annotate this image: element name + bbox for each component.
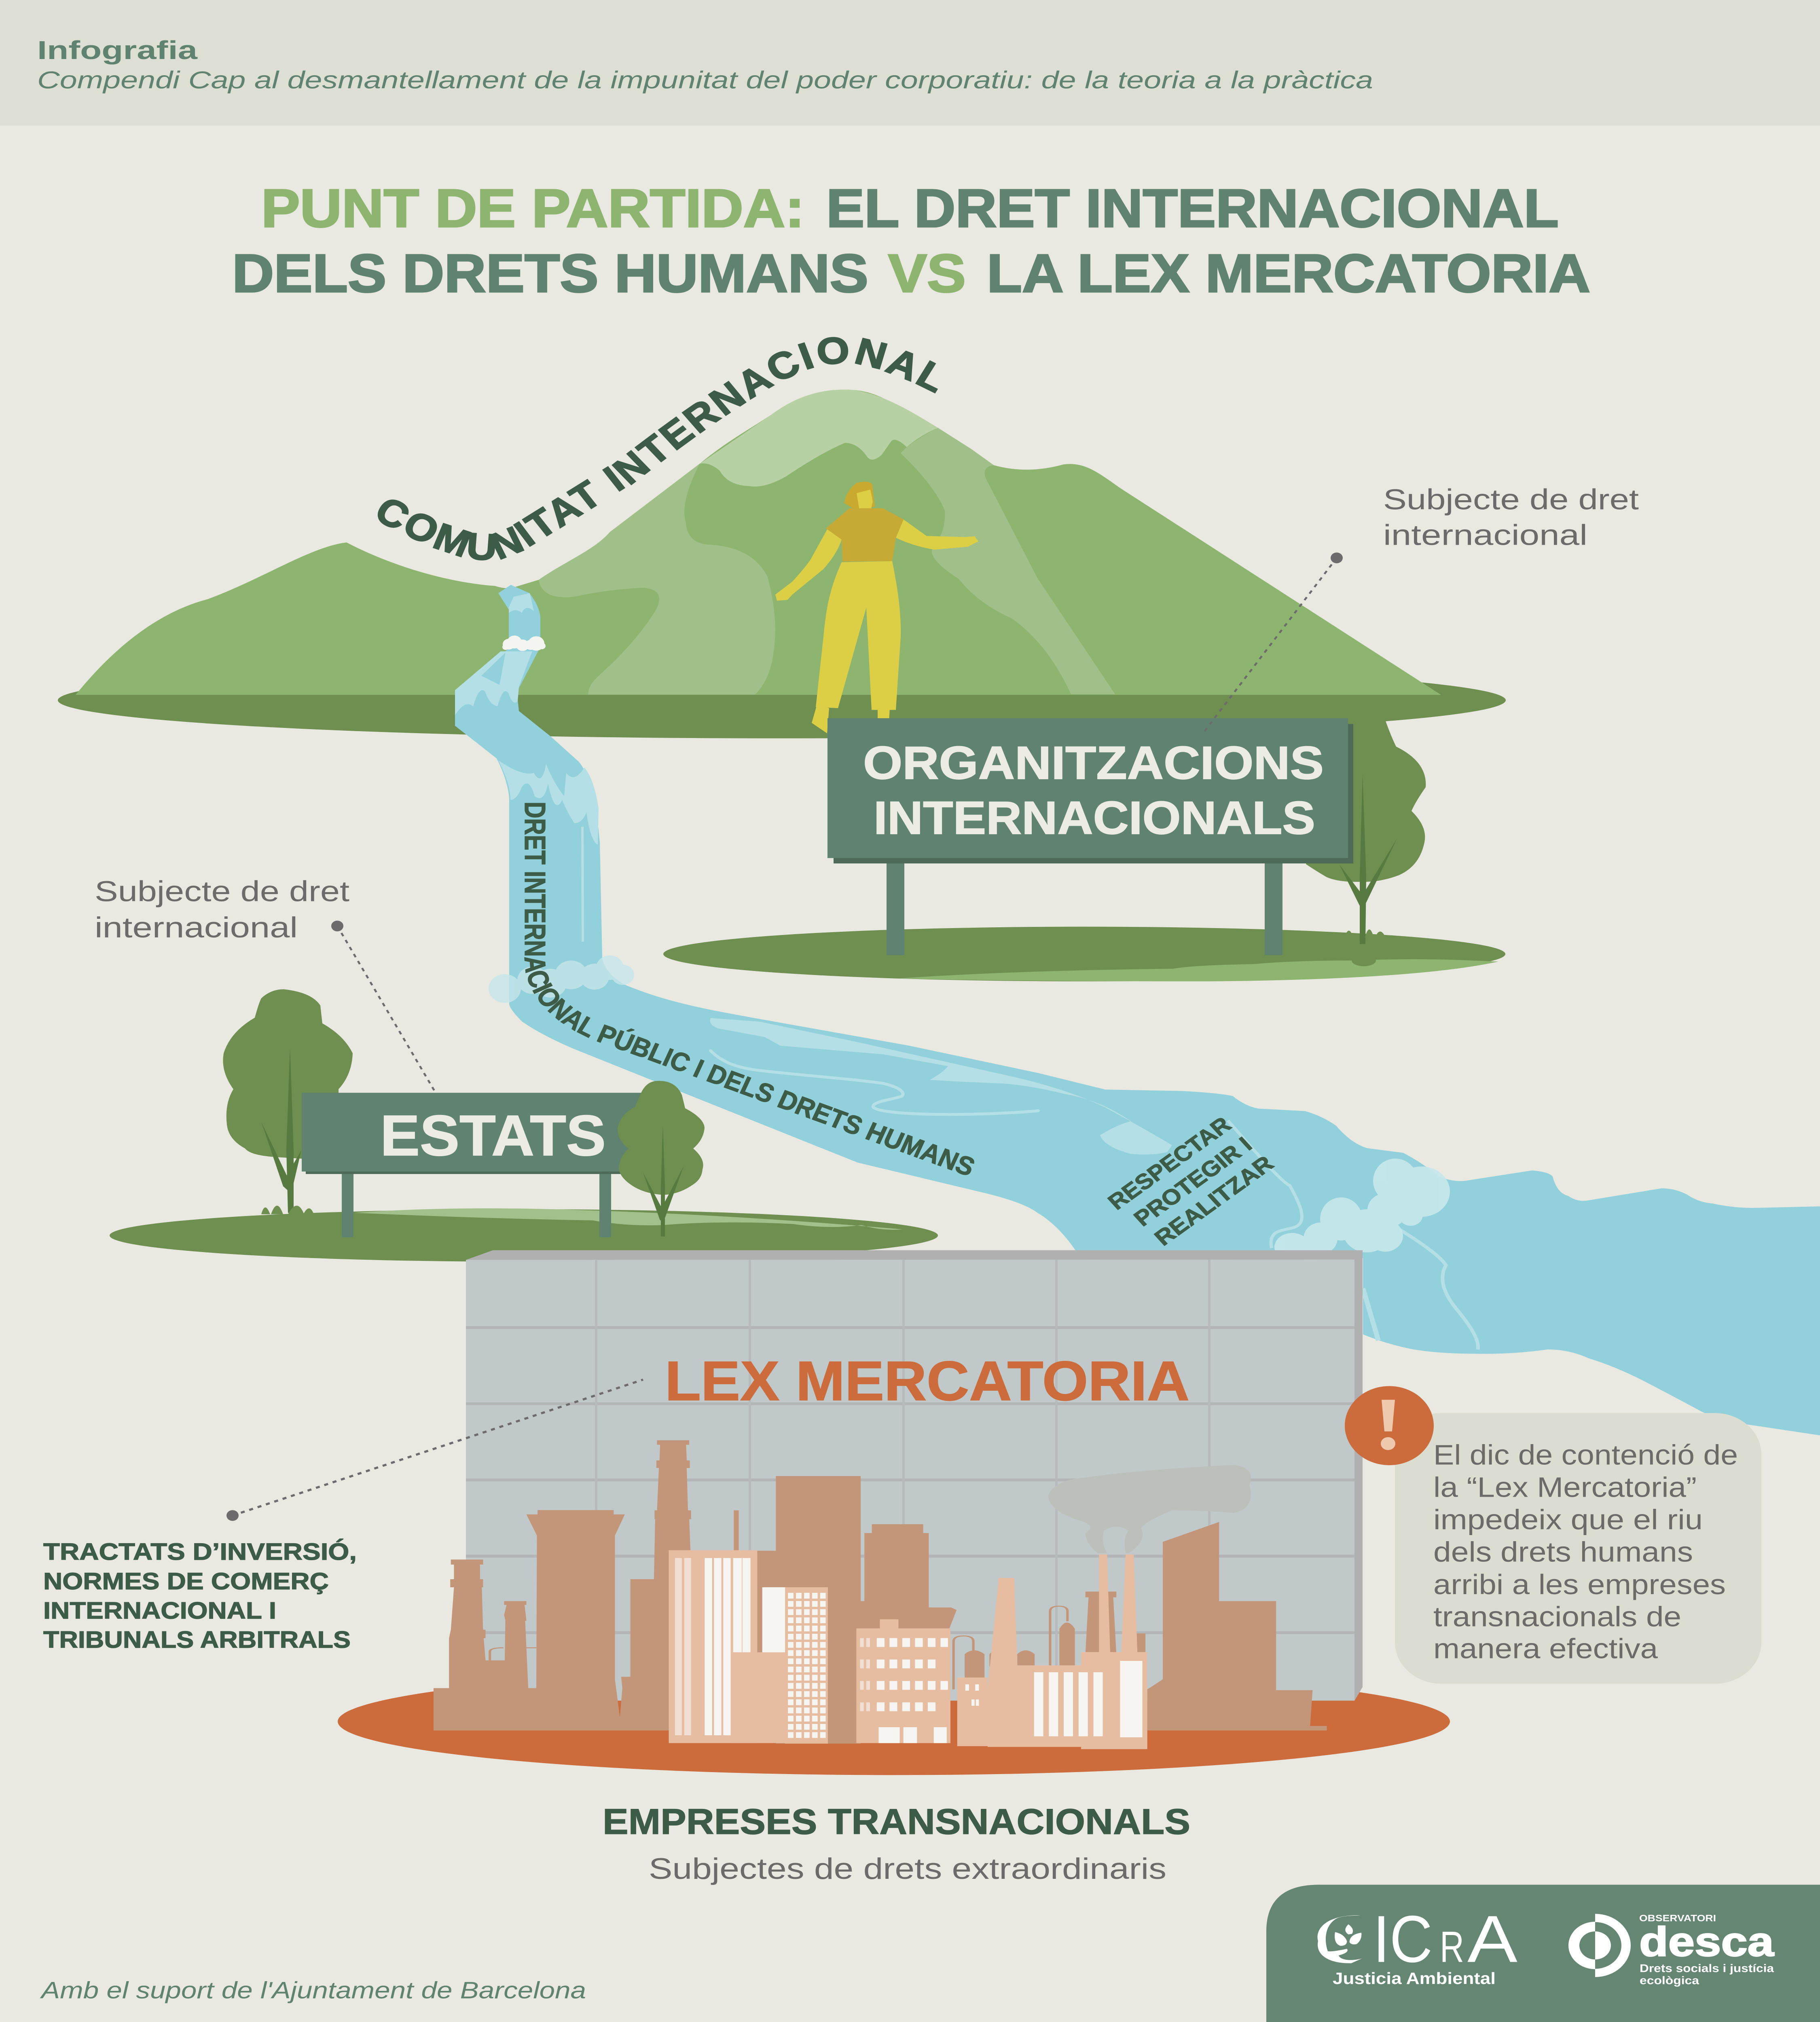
river thin current — [711, 1051, 1038, 1115]
tree: states right — [618, 1081, 705, 1237]
label: lex mercatoria instruments — [43, 1538, 357, 1653]
light tower — [669, 1550, 757, 1743]
dam wall: lex mercatoria — [466, 1250, 1363, 1701]
logo panel — [1266, 1885, 1820, 2022]
sign shadow — [306, 1168, 645, 1174]
heading: empreses transnacionals: EMPRESES TRANSNACIONALS — [603, 1802, 1190, 1842]
callout leader: lex mercatoria — [226, 1380, 643, 1521]
label: subjecte de dret, states: Subjecte de dret — [95, 876, 349, 907]
logo: cicra: IC — [1373, 1902, 1433, 1976]
label: subjecte de dret, states — [95, 876, 349, 944]
ground ellipse: companies — [338, 1668, 1450, 1775]
label: lex mercatoria instruments: TRIBUNALS ARBITRALS — [43, 1626, 351, 1653]
header band — [0, 0, 1820, 125]
person — [775, 482, 978, 733]
tree: organizations — [1306, 719, 1426, 966]
ground ellipse: states — [110, 1208, 938, 1262]
callout text: transnacionals de — [1433, 1601, 1681, 1632]
logo emblem — [1318, 1915, 1362, 1963]
tree: states left — [223, 989, 353, 1214]
logo: desca: Drets socials i justícia — [1640, 1962, 1774, 1975]
light factory — [957, 1555, 1147, 1749]
wall frame — [466, 1250, 1363, 1701]
dark buildings and chimneys — [434, 1440, 1327, 1744]
logo: desca: desca — [1639, 1919, 1775, 1965]
title: DELS DRETS HUMANS — [232, 243, 868, 304]
curved label: comunitat internacional: COMUNITAT INTERNACIONAL — [368, 328, 956, 569]
river — [455, 585, 1820, 1435]
callout text — [1433, 1439, 1738, 1664]
sign posts — [887, 858, 904, 955]
mountain peak highlight — [700, 390, 938, 486]
title: VS — [888, 243, 966, 304]
label: subjecte de dret, organizations: Subjecte de dret — [1383, 484, 1639, 516]
callout leader: organizations — [1202, 552, 1343, 734]
logo: desca: ecològica — [1640, 1974, 1699, 1987]
sign posts — [342, 1172, 353, 1237]
factory skyline — [434, 1440, 1327, 1749]
river right currents — [1228, 1121, 1302, 1248]
waterfall foam — [489, 956, 634, 1003]
light block three — [856, 1619, 950, 1743]
label: lex mercatoria instruments: INTERNACIONAL I — [43, 1597, 276, 1624]
mountain right light band — [901, 428, 1115, 694]
lower waterfall highlights — [498, 760, 599, 845]
subheading: subjectes de drets extraordinaris: Subjectes de drets extraordinaris — [649, 1853, 1166, 1885]
callout text: manera efectiva — [1433, 1633, 1658, 1664]
logo: desca — [1568, 1913, 1775, 1987]
sign: organitzacions internacionals: INTERNACIONALS — [874, 792, 1315, 844]
tree trunk and branches — [1339, 774, 1397, 944]
title: PUNT DE PARTIDA: — [261, 179, 804, 239]
callout text: El dic de contenció de — [1433, 1439, 1738, 1470]
river large foam — [1274, 1159, 1450, 1262]
person hair — [844, 482, 875, 511]
callout text: arribi a les empreses — [1433, 1569, 1726, 1600]
label: lex mercatoria instruments: TRACTATS D’INVERSIÓ, — [43, 1538, 357, 1565]
icon: warning — [1345, 1386, 1434, 1465]
upper waterfall highlights — [455, 651, 532, 715]
callout text: dels drets humans — [1433, 1536, 1693, 1567]
tree trunk and branches — [643, 1125, 684, 1237]
wall grid — [466, 1260, 1354, 1701]
river label: respectar, protegir, realitzar: PROTEGIR I — [1129, 1133, 1257, 1231]
ground ellipse: mountain — [58, 662, 1506, 738]
logo: cicra — [1318, 1902, 1517, 1988]
mountain — [76, 390, 1441, 695]
sign board — [302, 1093, 645, 1172]
callout text: impedeix que el riu — [1433, 1504, 1703, 1535]
sign text: ORGANITZACIONS — [863, 737, 1324, 789]
mountain left light band — [539, 464, 775, 694]
top foam — [502, 636, 546, 651]
logo: cicra: Justicia Ambiental — [1333, 1969, 1496, 1988]
callout leader: states — [331, 920, 435, 1092]
sign board — [827, 718, 1348, 858]
label: subjecte de dret, organizations: internacional — [1383, 519, 1587, 552]
person face — [857, 490, 873, 514]
river label: dret internacional: DRET INTERNACIONAL PÚBLIC I DELS DRETS HUMANS — [518, 802, 979, 1182]
logo: cicra: A — [1467, 1902, 1517, 1976]
river ripple — [710, 1018, 1172, 1155]
label: subjecte de dret, states: internacional — [95, 912, 298, 944]
callout text: la “Lex Mercatoria” — [1433, 1471, 1697, 1503]
pipes — [490, 1606, 1067, 1690]
person shirt — [826, 508, 904, 561]
light office block — [762, 1587, 785, 1652]
person arms — [775, 527, 842, 601]
sign text: ESTATS — [380, 1104, 606, 1168]
label: lex mercatoria instruments: NORMES DE COMERÇ — [43, 1568, 329, 1595]
wall heading: LEX MERCATORIA — [665, 1350, 1189, 1412]
sign: estats — [302, 1093, 645, 1237]
title: EL DRET INTERNACIONAL — [826, 179, 1559, 239]
sign shadow — [834, 724, 1353, 863]
river label: respectar, protegir, realitzar: REALITZAR — [1150, 1151, 1278, 1250]
river label: respectar, protegir, realitzar: RESPECTAR — [1103, 1113, 1236, 1214]
sign: organitzacions internacionals — [827, 718, 1353, 955]
header subtitle: Compendi Cap al desmantellament de la impunitat del poder corporatiu: de la teoria a la pràctica — [37, 66, 1373, 94]
logo: desca: OBSERVATORI — [1639, 1913, 1716, 1924]
support note: Amb el suport de l'Ajuntament de Barcelona — [40, 1977, 586, 2003]
tree grass — [261, 1206, 314, 1214]
tree grass — [1344, 929, 1386, 937]
logo: cicra: R — [1440, 1923, 1464, 1971]
smoke — [1048, 1465, 1251, 1553]
callout panel — [1345, 1386, 1761, 1684]
header label: Infografia — [37, 36, 198, 65]
tree trunk and branches — [261, 1047, 301, 1213]
title: LA LEX MERCATORIA — [987, 243, 1590, 304]
river label: respectar, protegir, realitzar — [1103, 1113, 1278, 1250]
label: subjecte de dret, organizations — [1383, 484, 1639, 552]
title — [232, 179, 1590, 304]
person legs — [816, 561, 901, 710]
ground ellipse: organizations — [663, 927, 1505, 981]
